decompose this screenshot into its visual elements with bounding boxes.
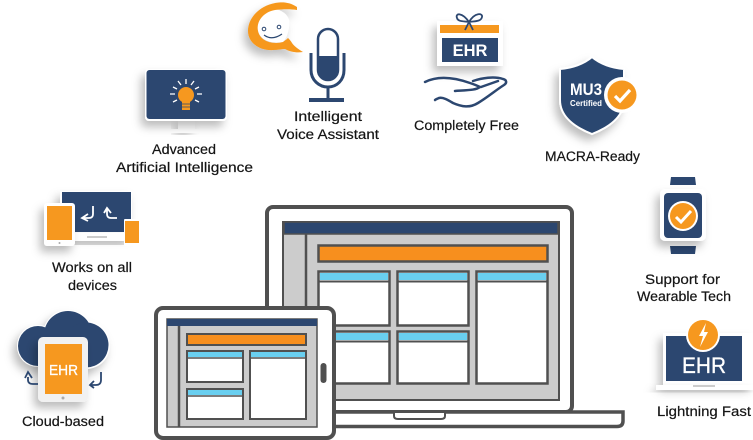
tablet illustration bbox=[156, 308, 334, 438]
arrow: right bbox=[90, 372, 101, 388]
laptop screen bbox=[283, 222, 559, 400]
tablet cards bbox=[187, 351, 306, 419]
icon: gift box: EHR bbox=[453, 42, 487, 60]
icon: cloud with tablet: EHR bbox=[49, 362, 78, 379]
tablet screen bbox=[167, 319, 317, 427]
icon: smartwatch bbox=[660, 177, 706, 254]
label: MACRA-Ready bbox=[545, 149, 640, 164]
laptop notch bbox=[394, 413, 445, 419]
icon: microphone bbox=[309, 29, 344, 102]
feature: MACRA-ready bbox=[545, 57, 640, 164]
label line 2: Voice Assistant bbox=[277, 127, 379, 142]
label: Intelligent bbox=[294, 109, 362, 124]
icon: shield badge: MU3 bbox=[570, 81, 602, 99]
label: Support for bbox=[645, 272, 721, 287]
label: Advanced bbox=[152, 142, 216, 157]
laptop lid bbox=[267, 207, 572, 412]
feature: cloud-based bbox=[17, 310, 110, 429]
laptop illustration bbox=[240, 207, 623, 426]
label line 2: Artificial Intelligence bbox=[116, 160, 253, 175]
laptop cards bbox=[318, 272, 548, 384]
icon: chat bubble bbox=[248, 2, 303, 52]
icon: shield badge: Certified bbox=[570, 98, 602, 108]
icon: shield badge bbox=[560, 57, 640, 134]
icon: laptop tablet phone bbox=[44, 191, 140, 246]
laptop base bbox=[240, 412, 623, 426]
feature: voice assistant bbox=[248, 2, 379, 142]
feature: lightning fast bbox=[656, 318, 753, 419]
feature: wearable tech bbox=[637, 177, 731, 304]
feature: artificial intelligence bbox=[116, 69, 253, 175]
feature: all devices bbox=[44, 191, 140, 293]
icon: monitor with bulb bbox=[145, 69, 227, 133]
feature: completely free bbox=[414, 14, 519, 133]
label line 2: devices bbox=[68, 278, 117, 293]
label: Works on all bbox=[52, 260, 132, 275]
icon: laptop with bolt: EHR bbox=[682, 353, 726, 378]
icon: open hand bbox=[425, 78, 506, 106]
label: Completely Free bbox=[414, 118, 519, 133]
tablet button bbox=[320, 363, 326, 383]
label: Lightning Fast bbox=[657, 404, 751, 419]
label: Cloud-based bbox=[22, 414, 104, 429]
label line 2: Wearable Tech bbox=[637, 289, 731, 304]
arrow: left bbox=[25, 372, 38, 384]
